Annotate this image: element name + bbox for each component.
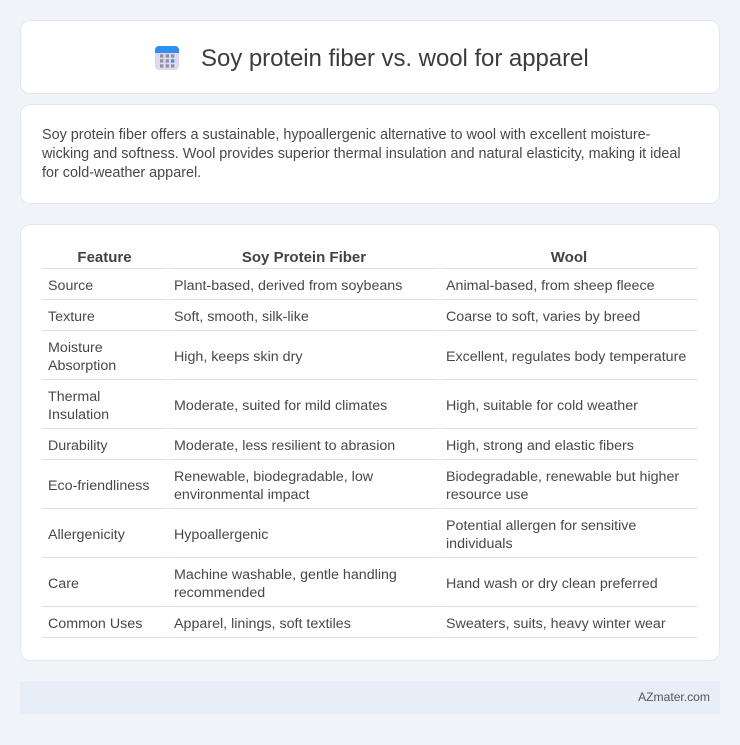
table header: Feature [77, 249, 132, 266]
row: moisture absorption [48, 340, 686, 374]
summary text: wicking and softness. Wool provides superior thermal insulation and natural elasticity, making it ideal [42, 146, 681, 162]
table header: Wool [551, 249, 587, 266]
row: moisture absorption: Absorption [48, 358, 116, 374]
row: eco-friendliness: Biodegradable, renewable but higher [446, 469, 679, 485]
row: texture: Soft, smooth, silk-like [174, 309, 309, 325]
row: common uses: Apparel, linings, soft textiles [174, 616, 351, 632]
footer bar [20, 681, 720, 714]
row: thermal insulation: Moderate, suited for mild climates [174, 398, 387, 414]
row: durability: Moderate, less resilient to abrasion [174, 438, 395, 454]
heading: Soy protein fiber vs. wool for apparel [201, 45, 589, 72]
row: thermal insulation [48, 389, 638, 423]
row: durability: Durability [48, 438, 107, 454]
row: texture: Texture [48, 309, 95, 325]
row: thermal insulation: Insulation [48, 407, 109, 423]
row dividers [42, 268, 697, 638]
row: care: recommended [174, 585, 265, 601]
summary text [42, 127, 681, 181]
row: eco-friendliness [48, 469, 679, 503]
row: care [48, 567, 658, 601]
icon: calendar [155, 46, 179, 70]
panel: summary [20, 104, 720, 204]
row: allergenicity: Potential allergen for sensitive [446, 518, 636, 534]
row: moisture absorption: Excellent, regulates body temperature [446, 349, 686, 365]
row: texture [48, 309, 640, 325]
row: care: Care [48, 576, 79, 592]
row: source: Animal-based, from sheep fleece [446, 278, 655, 294]
row: texture: Coarse to soft, varies by breed [446, 309, 640, 325]
row: moisture absorption: Moisture [48, 340, 103, 356]
panel: title [20, 20, 720, 94]
footer credit: AZmater.com [638, 690, 710, 704]
row: durability: High, strong and elastic fibers [446, 438, 634, 454]
row: eco-friendliness: resource use [446, 487, 528, 503]
row: common uses: Sweaters, suits, heavy winter wear [446, 616, 666, 632]
row: allergenicity [48, 518, 636, 552]
row: allergenicity: individuals [446, 536, 513, 552]
row: source [48, 278, 655, 294]
table header [77, 249, 587, 266]
panel: comparison table [20, 224, 720, 661]
row: source: Source [48, 278, 93, 294]
row: common uses [48, 616, 666, 632]
row: allergenicity: Allergenicity [48, 527, 125, 543]
row: common uses: Common Uses [48, 616, 142, 632]
row: eco-friendliness: environmental impact [174, 487, 310, 503]
row: eco-friendliness: Renewable, biodegradable, low [174, 469, 373, 485]
row: moisture absorption: High, keeps skin dry [174, 349, 302, 365]
row: care: Machine washable, gentle handling [174, 567, 397, 583]
row: thermal insulation: High, suitable for cold weather [446, 398, 638, 414]
row: eco-friendliness: Eco-friendliness [48, 478, 150, 494]
summary text: Soy protein fiber offers a sustainable, hypoallergenic alternative to wool with excellent moisture- [42, 127, 650, 143]
row: thermal insulation: Thermal [48, 389, 100, 405]
row: allergenicity: Hypoallergenic [174, 527, 268, 543]
row: durability [48, 438, 634, 454]
row: source: Plant-based, derived from soybeans [174, 278, 402, 294]
table header: Soy Protein Fiber [242, 249, 366, 266]
summary text: for cold-weather apparel. [42, 165, 201, 181]
row: care: Hand wash or dry clean preferred [446, 576, 658, 592]
